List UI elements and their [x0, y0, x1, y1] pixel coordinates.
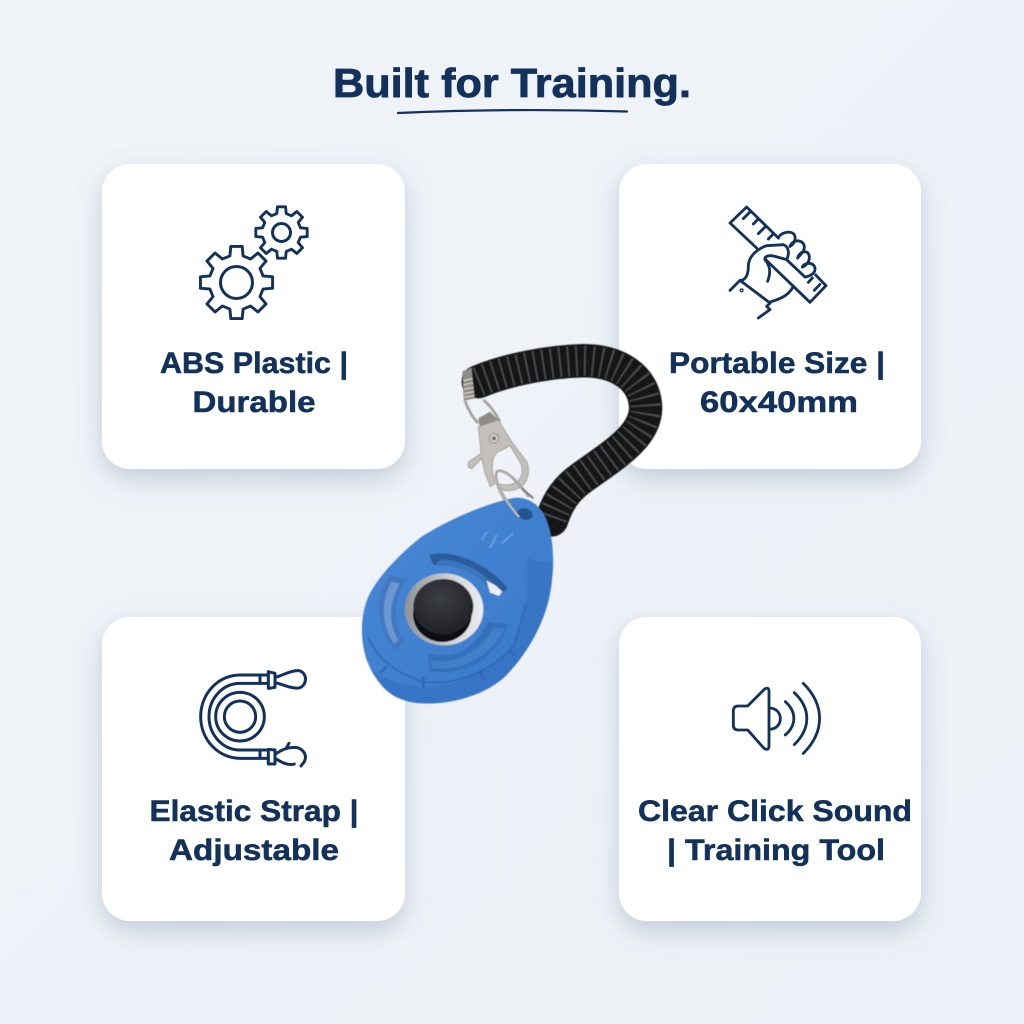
top slot: [429, 553, 508, 595]
icon: speaker: [733, 683, 820, 753]
panel: elastic strap: [102, 617, 405, 921]
panel: portable size: [619, 164, 921, 469]
logo mark: [482, 532, 513, 548]
label: portable size: Portable Size |: [669, 347, 885, 380]
label: portable size: [669, 347, 885, 419]
panel: click sound: [619, 617, 921, 921]
label: click sound: Clear Click Sound: [638, 795, 912, 828]
ring through lanyard hole: [495, 476, 519, 517]
rim teeth: [368, 605, 526, 683]
left slot: [379, 575, 407, 651]
panel: ABS plastic: [102, 164, 405, 469]
body outer side shading: [372, 557, 552, 703]
title underline: [398, 110, 627, 113]
black button: [413, 586, 472, 642]
label: elastic strap: Elastic Strap |: [150, 795, 358, 828]
clicker body: [362, 498, 553, 703]
metal plate: [405, 573, 483, 645]
label: elastic strap: Adjustable: [169, 834, 339, 867]
icon: coiled strap: [201, 671, 305, 766]
label: click sound: [638, 795, 912, 867]
icon: gears: [200, 207, 307, 319]
label: ABS plastic: [160, 347, 348, 419]
label: ABS plastic: Durable: [192, 386, 316, 419]
bottom slot: [428, 622, 508, 672]
title: Built for Training.: [333, 60, 691, 106]
coiled strap: [478, 361, 646, 520]
lanyard hole: [516, 506, 534, 522]
icon: hand holding ruler: [730, 207, 826, 318]
label: portable size: 60x40mm: [700, 386, 858, 419]
product: blue clicker with coiled wrist strap: [362, 361, 646, 703]
metal clasp and split ring: [462, 367, 533, 517]
label: click sound: | Training Tool: [667, 834, 885, 867]
label: ABS plastic: ABS Plastic |: [160, 347, 348, 380]
label: elastic strap: [150, 795, 358, 867]
